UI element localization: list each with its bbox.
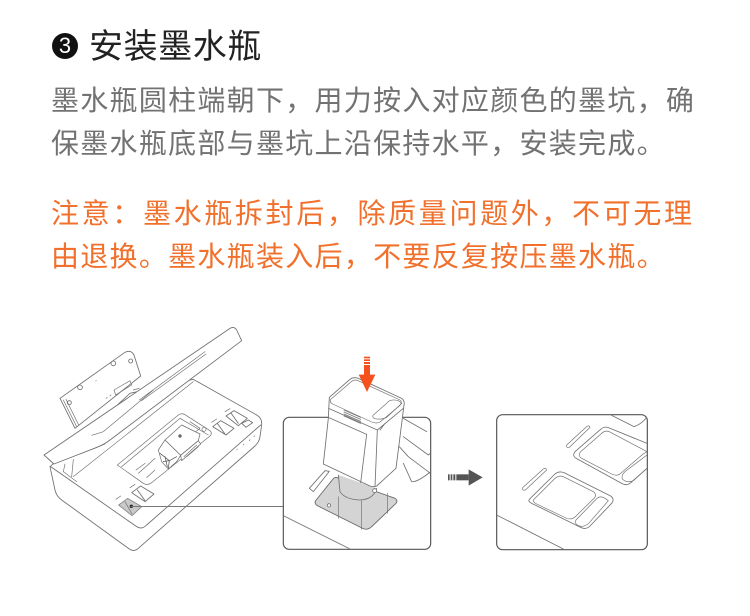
- grey ink well: [315, 477, 397, 529]
- step number badge: [52, 33, 78, 59]
- illustration: printer with open lid: [44, 327, 262, 551]
- heading text: 安装墨水瓶: [89, 28, 262, 66]
- step number badge: 3: [59, 33, 71, 58]
- lid detail line: [80, 352, 206, 454]
- illustration: bottle close-up: [283, 357, 483, 549]
- inner lid panel: [60, 351, 141, 428]
- bottle neck: [338, 475, 377, 500]
- ink slots right: [212, 409, 255, 450]
- warning text: [51, 198, 695, 272]
- illustration: installed close-up: [497, 415, 647, 550]
- heading: step 3: [52, 28, 262, 66]
- ink slots left: [116, 484, 154, 502]
- printer edge lines: [284, 418, 430, 549]
- warning text: 由退换。墨水瓶装入后，不要反复按压墨水瓶。: [51, 241, 666, 272]
- highlighted ink slot: [119, 498, 142, 516]
- ink bay: [117, 414, 211, 485]
- orange down arrow: [359, 357, 375, 392]
- printer base: [50, 379, 262, 551]
- upper ink well: [567, 426, 647, 485]
- well detail lines: [338, 493, 387, 529]
- close-up frame: [497, 415, 647, 550]
- grey right arrow: [448, 469, 483, 486]
- close-up frame: [283, 417, 431, 549]
- printer lid: [44, 327, 242, 464]
- instruction text: [51, 85, 695, 159]
- leader line: [131, 506, 329, 508]
- warning text: 注意：墨水瓶拆封后，除质量问题外，不可无理: [51, 198, 695, 229]
- instruction text: 保墨水瓶底部与墨坑上沿保持水平，安装完成。: [51, 128, 666, 159]
- instruction text: 墨水瓶圆柱端朝下，用力按入对应颜色的墨坑，确: [51, 85, 695, 116]
- ink bottle in bay: [158, 425, 201, 469]
- printer edge lines: [497, 415, 647, 549]
- ink bottle: [323, 378, 404, 487]
- lower ink well: [522, 468, 613, 528]
